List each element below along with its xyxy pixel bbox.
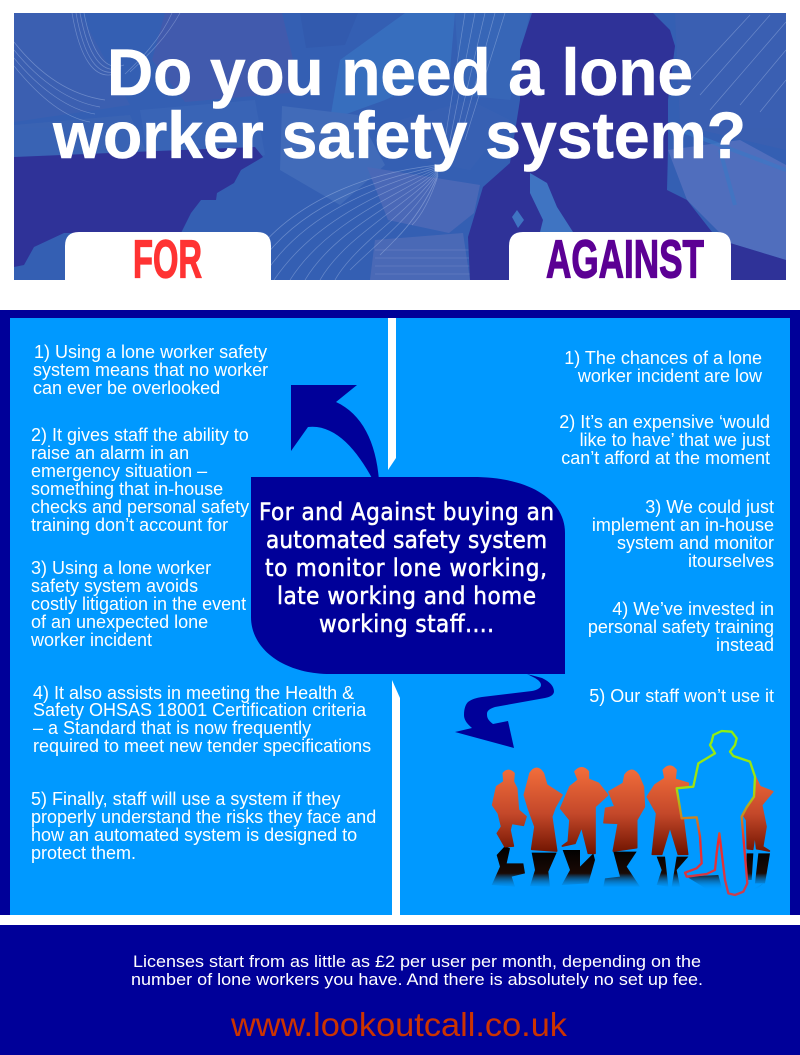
footer text <box>131 953 703 989</box>
silhouette hole <box>512 210 524 228</box>
list: against arguments: like to have’ that we just <box>580 430 770 450</box>
list: for arguments: how an automated system is designed to <box>31 825 357 845</box>
list: against arguments: system and monitor <box>617 533 774 553</box>
list: for arguments: safety system avoids <box>31 576 198 596</box>
list: against arguments: 3) We could just <box>645 497 774 517</box>
reflections <box>492 846 770 898</box>
silhouettes <box>493 766 773 854</box>
list: for arguments: emergency situation – <box>31 461 207 481</box>
tab: FOR <box>65 230 271 290</box>
list: for arguments <box>30 342 376 863</box>
list: against arguments: 4) We’ve invested in <box>612 599 774 619</box>
list: against arguments <box>559 348 774 706</box>
list: for arguments: required to meet new tender specifications <box>33 736 371 756</box>
tab: AGAINST: AGAINST <box>546 230 704 290</box>
list: against arguments: instead <box>716 635 774 655</box>
illustration: group of workers <box>492 731 773 898</box>
footer text: Licenses start from as little as £2 per user per month, depending on the <box>133 953 701 971</box>
highlighted worker outline <box>677 731 755 895</box>
list: for arguments: 3) Using a lone worker <box>31 558 211 578</box>
list: for arguments: – a Standard that is now frequently <box>33 718 311 738</box>
list: for arguments: 2) It gives staff the ability to <box>31 425 249 445</box>
tab: FOR: FOR <box>133 230 202 290</box>
list: against arguments: itourselves <box>688 551 774 571</box>
tab: AGAINST <box>509 230 731 290</box>
list: for arguments: can ever be overlooked <box>33 378 220 398</box>
callout text: automated safety system <box>266 526 547 554</box>
list: against arguments: 5) Our staff won’t use it <box>589 686 774 706</box>
list: for arguments: worker incident <box>30 630 152 650</box>
footer band <box>0 925 800 1055</box>
list: for arguments: system means that no worker <box>33 360 268 380</box>
callout: central speech bubble <box>251 477 565 674</box>
website url: www.lookoutcall.co.uk <box>230 1006 568 1043</box>
list: against arguments: implement an in-house <box>592 515 774 535</box>
list: for arguments: checks and personal safety <box>31 497 249 517</box>
list: against arguments: 2) It’s an expensive ‘would <box>559 412 770 432</box>
arrow: down to against list <box>455 674 554 748</box>
callout text: For and Against buying an <box>259 498 554 526</box>
header banner <box>14 13 786 280</box>
list: for arguments: Safety OHSAS 18001 Certification criteria <box>33 700 367 720</box>
list: for arguments: of an unexpected lone <box>31 612 208 632</box>
list: for arguments: protect them. <box>31 843 136 863</box>
arrow: up to for list <box>291 385 379 480</box>
list: against arguments: 1) The chances of a lone <box>564 348 762 368</box>
callout text <box>259 498 554 638</box>
list: for arguments: 5) Finally, staff will use a system if they <box>31 789 340 809</box>
title line two: worker safety system? <box>52 98 746 172</box>
silhouette gap between arm and body <box>530 173 573 232</box>
list: for arguments: costly litigation in the event <box>31 594 246 614</box>
list: for arguments: training don’t account for <box>31 515 228 535</box>
list: for arguments: something that in-house <box>31 479 223 499</box>
callout text: working staff.... <box>319 610 494 638</box>
list: against arguments: worker incident are low <box>577 366 763 386</box>
title <box>52 35 746 172</box>
list: against arguments: can’t afford at the moment <box>561 448 770 468</box>
silhouette: left figure <box>14 147 263 267</box>
callout text: to monitor lone working, <box>265 554 547 582</box>
title: Do you need a lone <box>107 35 693 109</box>
list: against arguments: personal safety training <box>588 617 774 637</box>
list: for arguments: raise an alarm in an <box>31 443 189 463</box>
callout text: late working and home <box>277 582 536 610</box>
silhouette: right figure <box>468 13 786 280</box>
list: for arguments: properly understand the risks they face and <box>31 807 376 827</box>
footer text: number of lone workers you have. And there is absolutely no set up fee. <box>131 971 703 989</box>
list: for arguments: 4) It also assists in meeting the Health & <box>33 683 354 703</box>
main panel <box>0 310 800 925</box>
list: for arguments: 1) Using a lone worker safety <box>34 342 267 362</box>
